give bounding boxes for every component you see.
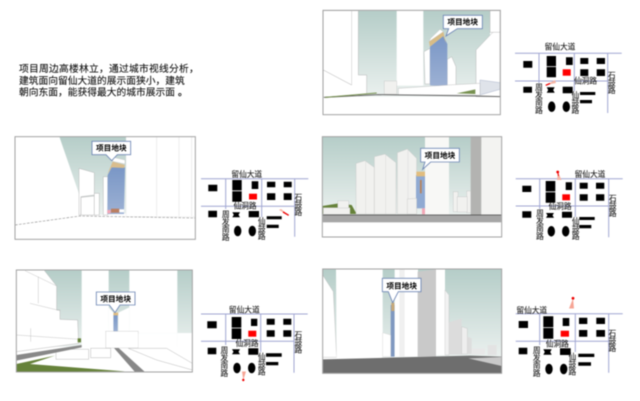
- ground line: [15, 216, 195, 225]
- callout: 项目地块: 项目地块: [96, 143, 127, 153]
- road labels: 仙鼓路: [571, 90, 580, 114]
- green hill: [322, 201, 357, 214]
- view arrow: [546, 80, 556, 85]
- road labels: [535, 169, 617, 240]
- target tower: [391, 303, 395, 357]
- panel: street view 3: [322, 137, 502, 237]
- roads and green: [16, 338, 145, 372]
- callout: 项目地块: [421, 148, 459, 169]
- road labels: 周发南路: [535, 209, 544, 240]
- target tower: [107, 157, 125, 214]
- central white tower: [397, 11, 423, 86]
- callout: 项目地块: [443, 15, 482, 36]
- road labels: [220, 304, 303, 377]
- map 3: [516, 169, 623, 240]
- road labels: 仙洞路: [233, 201, 257, 211]
- view arrow: [556, 171, 562, 180]
- site marker: [562, 194, 570, 200]
- road labels: 仙洞路: [574, 76, 597, 86]
- right buildings: [476, 11, 500, 97]
- map 4: [201, 304, 308, 381]
- road labels: 仙鼓路: [571, 216, 580, 240]
- ground band: [323, 215, 501, 222]
- podium and road edge: [324, 83, 500, 114]
- road labels: 留仙大道: [229, 304, 260, 314]
- map 1: [515, 42, 622, 114]
- road labels: 留仙大道: [231, 169, 262, 179]
- right building: [126, 137, 195, 217]
- site marker: [563, 69, 571, 76]
- road labels: 仙鼓路: [257, 351, 266, 376]
- road labels: 周发南路: [532, 346, 541, 377]
- road labels: 周发南路: [534, 83, 544, 114]
- callout: 项目地块: [382, 278, 421, 303]
- road labels: 留仙大道: [545, 42, 576, 52]
- road labels: 石鼓路: [607, 71, 616, 94]
- view arrow: [279, 209, 289, 216]
- text block: site analysis description: 项目周边高楼林立，通过城市视线分析，: [19, 62, 199, 75]
- road labels: 留仙大道: [575, 169, 606, 179]
- target tower: [416, 172, 425, 214]
- panel: street view 4: [16, 270, 192, 372]
- ground: [323, 356, 502, 373]
- road labels: [534, 42, 616, 114]
- map blocks: [522, 181, 604, 228]
- site marker: [249, 194, 257, 200]
- podium: [56, 331, 192, 370]
- road labels: 仙洞路: [546, 339, 569, 349]
- callout: 项目地块: 项目地块: [386, 280, 417, 290]
- small mid buildings: [79, 168, 108, 215]
- road labels: 石鼓路: [294, 330, 303, 354]
- left buildings: [323, 11, 367, 97]
- map 2: [201, 169, 308, 241]
- text block: site analysis description: 建筑面向留仙大道的展示面狭小，建筑: [19, 74, 185, 87]
- panel: street view 2: [15, 137, 195, 239]
- panel: street view 5: [323, 269, 502, 373]
- text block: site analysis description: [19, 62, 199, 98]
- map blocks: [519, 316, 605, 366]
- small buildings: [384, 48, 456, 94]
- distant buildings: [453, 191, 471, 213]
- road labels: 仙洞路: [235, 338, 259, 348]
- road labels: 周发南路: [220, 346, 229, 377]
- text block: site analysis description: 朝向东面，能获得最大的城市展示面: [19, 88, 175, 98]
- white towers: [82, 270, 192, 350]
- road labels: 仙洞路: [548, 201, 572, 211]
- white towers: [356, 149, 417, 214]
- map blocks: [208, 180, 292, 228]
- central buildings: [395, 269, 449, 357]
- left building: [15, 137, 81, 225]
- road labels: 周发南路: [221, 210, 230, 241]
- road labels: 石鼓路: [608, 329, 617, 352]
- view arrow: [242, 372, 246, 381]
- road labels: 留仙大道: [516, 305, 547, 315]
- road labels: 仙鼓路: [568, 351, 577, 376]
- target tower: [113, 313, 118, 332]
- road labels: [221, 169, 303, 241]
- site marker: [248, 331, 256, 337]
- target tower: [429, 29, 447, 87]
- callout: 项目地块: [92, 141, 131, 161]
- callout: 项目地块: 项目地块: [100, 294, 131, 304]
- site marker: [561, 331, 569, 337]
- left white buildings: [323, 269, 391, 359]
- map 5: [516, 297, 623, 377]
- road labels: [516, 305, 617, 377]
- panel: street view 1: [323, 10, 500, 115]
- left buildings: [16, 270, 80, 352]
- text block: site analysis description: 。: [178, 88, 188, 98]
- distant buildings: [449, 318, 497, 355]
- road labels: 石鼓路: [608, 194, 617, 217]
- map blocks: [523, 56, 605, 103]
- callout: 项目地块: [96, 292, 135, 313]
- road labels: 仙鼓路: [257, 216, 266, 240]
- callout: 项目地块: 项目地块: [425, 150, 456, 160]
- map blocks: [207, 317, 291, 365]
- view arrow: [569, 297, 574, 308]
- road labels: 石鼓路: [294, 193, 303, 216]
- foreground buildings: [407, 137, 502, 215]
- callout: 项目地块: 项目地块: [447, 17, 478, 27]
